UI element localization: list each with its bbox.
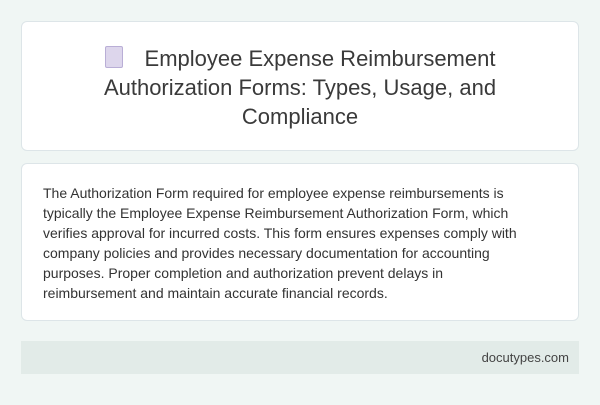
text block: The Authorization Form required for employee expense reimbursements is typically the Employee Expense Reimbursement Authorization Form, which verifies approval for incurred costs. This form ensures expenses comply with company policies and provides necessary documentation for accounting purposes. Proper completion and authorization prevent delays in reimbursement and maintain accurate financial records.: [43, 185, 517, 301]
title: Employee Expense Reimbursement Authorization Forms: Types, Usage, and Compliance: [104, 46, 496, 129]
panel: description: [21, 163, 579, 321]
footer text: docutypes.com: [482, 350, 569, 365]
footer: [21, 341, 579, 374]
panel: title: [21, 21, 579, 151]
icon: document: [105, 46, 123, 68]
